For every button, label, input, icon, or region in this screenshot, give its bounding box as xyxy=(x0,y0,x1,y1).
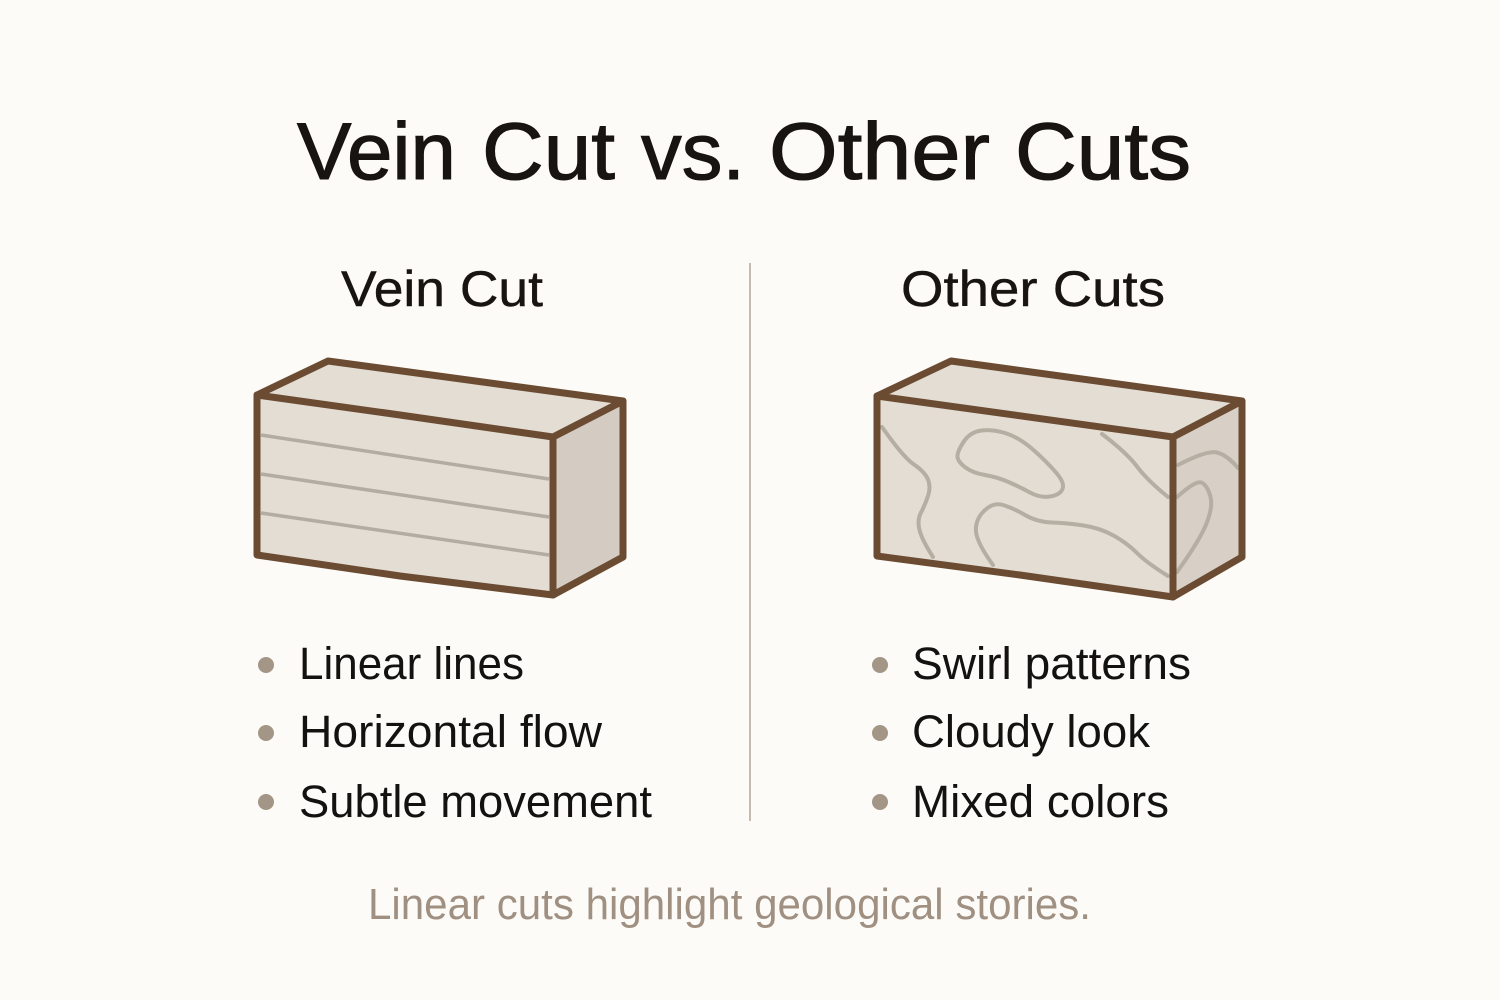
title: Cuts xyxy=(1015,107,1191,197)
panel: other cuts xyxy=(872,261,1242,827)
bullet: horizontal flow: Horizontal flow xyxy=(299,706,603,757)
heading: other cuts: Other Cuts xyxy=(901,261,1165,317)
list: vein cut traits xyxy=(258,638,652,827)
bullet: swirl patterns: Swirl patterns xyxy=(912,638,1191,689)
title: Vein xyxy=(297,107,456,197)
title: Cut xyxy=(482,107,615,197)
icon: block with linear veins xyxy=(257,361,623,595)
bullet: cloudy look: Cloudy look xyxy=(912,706,1150,757)
list: other cuts traits xyxy=(872,638,1191,827)
panel: vein cut xyxy=(257,261,652,827)
title xyxy=(297,107,1191,197)
icon: block with swirl veins xyxy=(877,361,1242,597)
footer caption: Linear cuts highlight geological stories. xyxy=(368,880,1091,929)
bullet: subtle movement: Subtle movement xyxy=(299,776,652,827)
title: vs. xyxy=(641,107,745,197)
title: Other xyxy=(769,107,990,197)
heading: vein cut: Vein Cut xyxy=(341,261,543,317)
bullet: linear lines: Linear lines xyxy=(299,638,524,689)
bullet: mixed colors: Mixed colors xyxy=(912,776,1169,827)
